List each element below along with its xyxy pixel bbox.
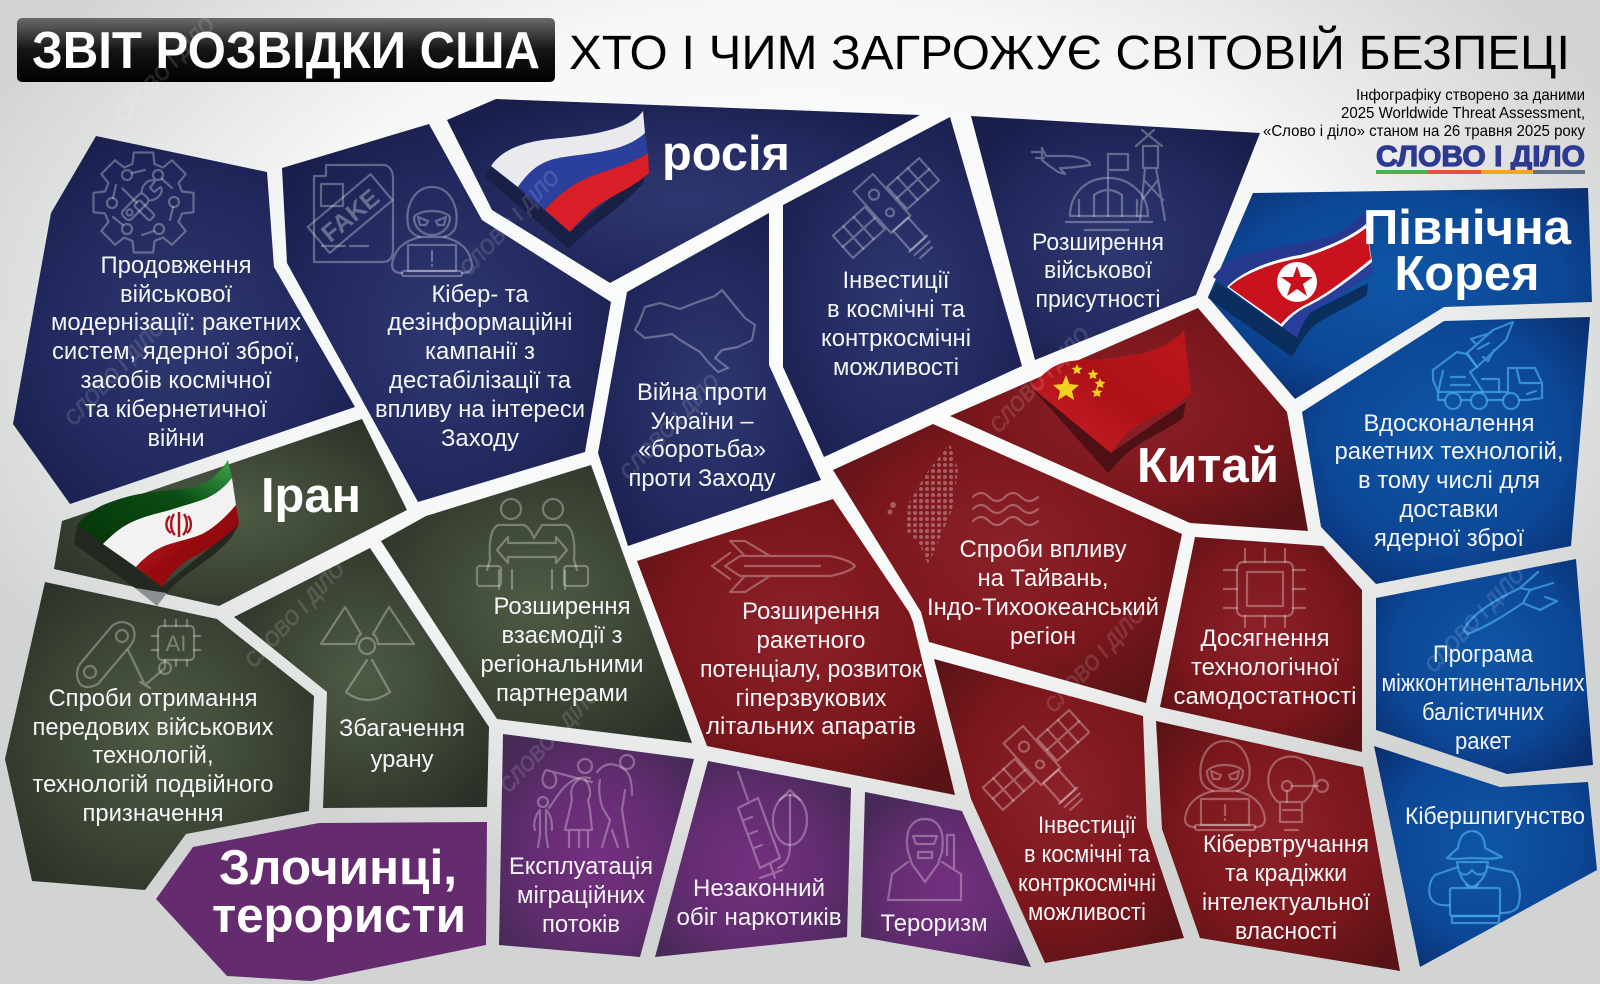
text: cyber attacks china: інтелектуальної <box>1202 889 1370 916</box>
text: missile technologies: ядерної зброї <box>1374 525 1524 552</box>
text: missile potential: гіперзвукових <box>736 685 886 712</box>
icon: rocket launcher truck <box>1433 322 1542 409</box>
text: taiwan: Індо-Тихоокеанський <box>927 594 1159 621</box>
text: ai and dual use: технологій подвійного <box>32 771 274 798</box>
text: terrorism: Тероризм <box>880 910 988 937</box>
text: missile technologies: доставки <box>1400 496 1498 523</box>
icon: military base <box>1032 130 1165 230</box>
icon: hacker and bulb <box>1185 741 1328 830</box>
text: war against Ukraine: України – <box>650 408 754 435</box>
text: space russia <box>821 267 971 381</box>
text: cyber and disinformation: впливу на інтереси <box>375 396 585 423</box>
panel: space russia <box>783 117 1022 457</box>
watermarks: СЛОВО І ДІЛО <box>1039 602 1150 718</box>
text: taiwan: Спроби впливу <box>960 536 1126 563</box>
logo: СЛОВО І ДІЛО <box>1376 141 1585 173</box>
text: cyber and disinformation: дестабілізації та <box>389 367 572 394</box>
panel: modernization <box>13 136 355 504</box>
text: modernization: війни <box>148 425 204 452</box>
text: space china: Інвестиції <box>1038 812 1136 839</box>
text: space china: в космічні та <box>1024 841 1151 868</box>
text: cyber attacks china: власності <box>1235 918 1337 945</box>
watermarks: СЛОВО І ДІЛО <box>1419 562 1530 678</box>
watermarks: СЛОВО І ДІЛО <box>454 165 565 281</box>
text: ICBM: балістичних <box>1422 699 1544 726</box>
heading: russia: росія <box>662 127 790 181</box>
panel: regional partners <box>381 465 692 743</box>
text: technological self-sufficiency: технологічної <box>1191 654 1339 681</box>
text: military presence <box>1032 229 1164 313</box>
icon: cruise missile <box>712 541 855 592</box>
text: ICBM: Програма <box>1433 641 1534 668</box>
heading: iran: Іран <box>261 469 361 523</box>
heading: north korea <box>1363 201 1572 301</box>
text: missile technologies: ракетних технологій, <box>1334 438 1564 465</box>
heading: criminals and terrorists: Злочинці, <box>219 841 457 895</box>
icon: masked terrorist <box>888 819 961 900</box>
text: taiwan <box>927 536 1159 650</box>
panel: ICBM <box>1376 559 1593 774</box>
panel: north korea <box>1208 188 1592 399</box>
icon: satellite <box>820 144 969 291</box>
text: drugs: обіг наркотиків <box>676 904 842 931</box>
text: regional partners: регіональними <box>480 651 644 678</box>
panel: uranium enrichment <box>234 548 489 808</box>
icon: fake document and hacker <box>308 165 472 276</box>
panel: iran <box>54 419 407 606</box>
text: military presence: присутності <box>1036 286 1160 313</box>
text: taiwan: регіон <box>1010 623 1076 650</box>
text: migration <box>509 853 653 938</box>
watermarks: СЛОВО І ДІЛО <box>984 322 1095 438</box>
text: missile technologies: в тому числі для <box>1358 467 1540 494</box>
heading: north korea: Північна <box>1363 201 1572 255</box>
panel: russia <box>447 99 920 283</box>
panel: missile potential <box>637 499 955 795</box>
flag: china <box>1031 330 1191 473</box>
icon: migrants <box>534 755 634 847</box>
watermarks <box>59 12 1530 798</box>
icon: satellite <box>970 696 1119 843</box>
text: ICBM: ракет <box>1455 728 1511 755</box>
panel: technological self-sufficiency <box>1160 537 1362 752</box>
icon: map of Ukraine <box>635 290 755 372</box>
text: regional partners: партнерами <box>496 680 628 707</box>
text: migration: міграційних <box>517 882 645 909</box>
text: cyber attacks china <box>1202 831 1370 945</box>
text: taiwan: на Тайвань, <box>978 565 1108 592</box>
panel: missile technologies <box>1302 317 1590 584</box>
text: modernization: та кібернетичної <box>85 396 267 423</box>
text: modernization <box>51 252 301 452</box>
text: migration: Експлуатація <box>509 853 653 880</box>
text: space china: можливості <box>1028 899 1146 926</box>
panel: taiwan <box>833 424 1182 703</box>
text: modernization: Продовження <box>100 252 252 279</box>
text: regional partners: Розширення <box>494 593 630 620</box>
text: drugs <box>676 875 842 931</box>
source note <box>1263 87 1585 140</box>
text: drugs: Незаконний <box>693 875 825 902</box>
icon: ballistic missile <box>1464 572 1557 634</box>
text: ai and dual use: технологій, <box>92 742 214 769</box>
text: war against Ukraine: «боротьба» <box>638 436 766 463</box>
text: regional partners: взаємодії з <box>502 622 622 649</box>
panel: war against Ukraine <box>598 213 821 546</box>
heading: criminals and terrorists <box>212 841 466 943</box>
text: cyber and disinformation: кампанії з <box>425 338 535 365</box>
icon: radiation <box>321 607 414 700</box>
text: space china <box>1018 812 1156 926</box>
text: war against Ukraine: Війна проти <box>637 379 767 406</box>
text: modernization: модернізації: ракетних <box>51 309 301 336</box>
text: space russia: контркосмічні <box>821 325 971 352</box>
text: ai and dual use <box>32 685 274 827</box>
text: uranium enrichment: Збагачення <box>339 715 465 742</box>
text: uranium enrichment: урану <box>370 746 434 773</box>
text: cyber and disinformation: Заходу <box>441 425 519 452</box>
heading: north korea: Корея <box>1394 247 1540 301</box>
text: cyber espionage: Кібершпигунство <box>1405 803 1585 830</box>
panel: cyber and disinformation <box>282 124 611 502</box>
text: military presence: військової <box>1044 257 1152 284</box>
flag: russia <box>485 111 649 249</box>
flag: iran <box>74 460 239 606</box>
title badge: ЗВІТ РОЗВІДКИ США <box>32 22 540 80</box>
watermarks: СЛОВО І ДІЛО <box>59 315 170 431</box>
panel: china <box>950 308 1308 531</box>
icon: robot arm and AI chip: AI <box>166 631 186 656</box>
source note: Інфографіку створено за даними <box>1356 87 1585 104</box>
text: missile potential: ракетного <box>756 627 866 654</box>
text: technological self-sufficiency <box>1174 625 1356 710</box>
text: ai and dual use: Спроби отримання <box>48 685 258 712</box>
text: missile potential: літальних апаратів <box>706 713 916 740</box>
flag: north korea <box>1208 210 1373 357</box>
subtitle heading: ХТО І ЧИМ ЗАГРОЖУЄ СВІТОВІЙ БЕЗПЕЦІ <box>569 25 1570 80</box>
source note: «Слово і діло» станом на 26 травня 2025 року <box>1263 123 1585 140</box>
icon: two people with briefcases <box>477 499 588 589</box>
panel: criminals and terrorists <box>156 822 487 981</box>
text: space russia: можливості <box>833 354 959 381</box>
text: technological self-sufficiency: самодостатності <box>1174 683 1356 710</box>
text: missile potential <box>700 598 922 740</box>
text: space china: контркосмічні <box>1018 870 1156 897</box>
panel: terrorism <box>861 792 1031 967</box>
text: cyber and disinformation: Кібер- та <box>432 281 529 308</box>
panel: cyber attacks china <box>1156 721 1400 971</box>
source note: 2025 Worldwide Threat Assessment, <box>1341 105 1585 122</box>
watermarks: СЛОВО І ДІЛО <box>494 682 605 798</box>
panel: space china <box>934 659 1184 963</box>
text: modernization: засобів космічної <box>80 367 272 394</box>
icon: gear with tools <box>94 152 194 252</box>
watermarks: СЛОВО І ДІЛО <box>239 557 350 673</box>
text: cyber and disinformation: дезінформаційні <box>388 309 572 336</box>
text: missile technologies <box>1334 410 1564 552</box>
heading: criminals and terrorists: терористи <box>212 889 466 943</box>
icon: syringe and poppy <box>738 772 807 878</box>
text: ICBM <box>1382 641 1584 755</box>
heading: china: Китай <box>1137 439 1279 493</box>
text: missile potential: Розширення <box>742 598 880 625</box>
text: regional partners <box>480 593 644 707</box>
text: missile potential: потенціалу, розвиток <box>700 656 922 683</box>
text: missile technologies: Вдосконалення <box>1364 410 1534 437</box>
text: migration: потоків <box>542 911 620 938</box>
text: war against Ukraine <box>628 379 776 492</box>
text: military presence: Розширення <box>1032 229 1164 256</box>
icon: robot arm and AI chip <box>77 620 200 688</box>
panel: ai and dual use <box>5 582 314 890</box>
panel: drugs <box>655 761 851 957</box>
icon: chip <box>1224 549 1305 627</box>
watermarks: СЛОВО І ДІЛО <box>614 369 725 485</box>
icon: taiwan dot map and waves <box>888 443 1038 564</box>
text: space russia: в космічні та <box>827 296 966 323</box>
panel: migration <box>499 734 694 957</box>
text: modernization: систем, ядерної зброї, <box>52 338 300 365</box>
text: modernization: військової <box>120 281 232 308</box>
text: cyber attacks china: та крадіжки <box>1225 860 1347 887</box>
text: cyber and disinformation <box>375 281 585 452</box>
text: ai and dual use: призначення <box>82 800 224 827</box>
watermarks: СЛОВО І ДІЛО <box>109 12 220 128</box>
icon: fake document and hacker: FAKE <box>316 184 385 248</box>
text: space russia: Інвестиції <box>842 267 950 294</box>
text: uranium enrichment <box>339 715 465 773</box>
icon: spy <box>1429 831 1520 923</box>
panel: military presence <box>971 116 1260 360</box>
text: cyber attacks china: Кібервтручання <box>1203 831 1369 858</box>
text: ai and dual use: передових військових <box>32 714 274 741</box>
panel: cyber espionage <box>1374 746 1597 967</box>
text: technological self-sufficiency: Досягнення <box>1200 625 1330 652</box>
text: war against Ukraine: проти Заходу <box>628 465 776 492</box>
